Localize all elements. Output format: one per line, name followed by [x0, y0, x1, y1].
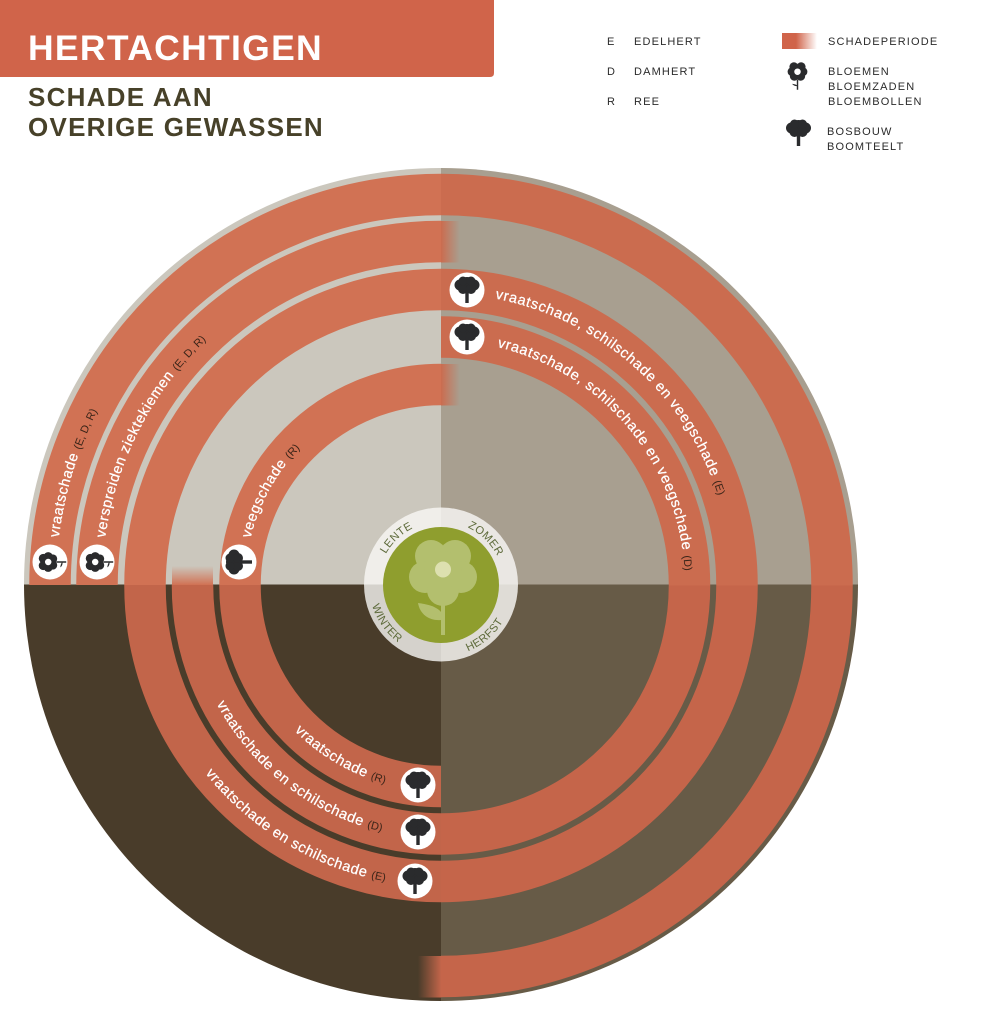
icon: tree, ring 4 top: [450, 320, 484, 354]
title banner: [0, 0, 494, 77]
legend: flowers: [788, 62, 923, 108]
label: vraatschade en schilschade (E): vraatschade en schilschade (E): [206, 768, 386, 883]
wheel background quadrants: [24, 168, 858, 1001]
legend: species: DAMHERT: [634, 66, 696, 78]
legend: flowers: BLOEMZADEN: [828, 81, 915, 93]
icon: tree, ring 5 bottom: [400, 768, 436, 802]
legend: species: [607, 36, 702, 108]
icon: tree, ring 3 bottom: [398, 864, 432, 898]
label: vraatschade (E, D, R): vraatschade (E, D, R): [51, 409, 98, 537]
icon: tree, ring 4 bottom: [400, 814, 436, 850]
season labels: LENTE: [380, 522, 412, 554]
icon: tree, ring 3 top: [450, 272, 484, 308]
subtitle: OVERIGE GEWASSEN: [28, 112, 324, 142]
legend: flowers: BLOEMBOLLEN: [828, 96, 923, 108]
icon: flower, ring 2: [80, 544, 114, 580]
season labels: HERFST: [466, 617, 502, 651]
subtitle: [28, 82, 324, 142]
season labels: WINTER: [372, 602, 402, 642]
legend: forestry: [786, 120, 904, 153]
season labels: ZOMER: [468, 520, 503, 556]
legend: forestry: BOOMTEELT: [827, 141, 904, 153]
legend: species: REE: [634, 96, 660, 108]
label: vraatschade, schilschade en veegschade (D): vraatschade, schilschade en veegschade (D): [498, 339, 692, 570]
ring 4: damhert: [172, 337, 690, 834]
legend: species: R: [607, 96, 616, 108]
legend: species: EDELHERT: [634, 36, 702, 48]
legend: species: D: [607, 66, 616, 78]
ring 3: edelhert: [145, 290, 737, 882]
label: vraatschade en schilschade (D): vraatschade en schilschade (D): [218, 700, 382, 833]
ring 2: verspreiden ziektekiemen: [97, 221, 460, 585]
label: verspreiden ziektekiemen (E, D, R): verspreiden ziektekiemen (E, D, R): [97, 336, 206, 537]
centre season dial: [364, 508, 518, 662]
icon: flower in centre: [409, 540, 477, 635]
legend: damage period: SCHADEPERIODE: [828, 36, 938, 48]
ring 5: ree: [240, 364, 460, 786]
label: vraatschade (R): vraatschade (R): [296, 725, 386, 786]
label: vraatschade, schilschade en veegschade (E): vraatschade, schilschade en veegschade (E): [496, 290, 725, 495]
ring 1: vraatschade E, D, R: [50, 194, 832, 998]
title banner: HERTACHTIGEN: [28, 28, 323, 68]
label: veegschade (R): veegschade (R): [243, 444, 300, 536]
seasonal wheel chart: [24, 168, 858, 1001]
icon: tree, ring 5: [222, 544, 256, 580]
icon: flower, ring 1: [32, 544, 68, 580]
legend: damage period: [782, 33, 938, 49]
legend: forestry: BOSBOUW: [827, 126, 892, 138]
season labels: [372, 520, 503, 651]
legend: species: E: [607, 36, 616, 48]
subtitle: SCHADE AAN: [28, 82, 213, 112]
legend: flowers: BLOEMEN: [828, 66, 890, 78]
